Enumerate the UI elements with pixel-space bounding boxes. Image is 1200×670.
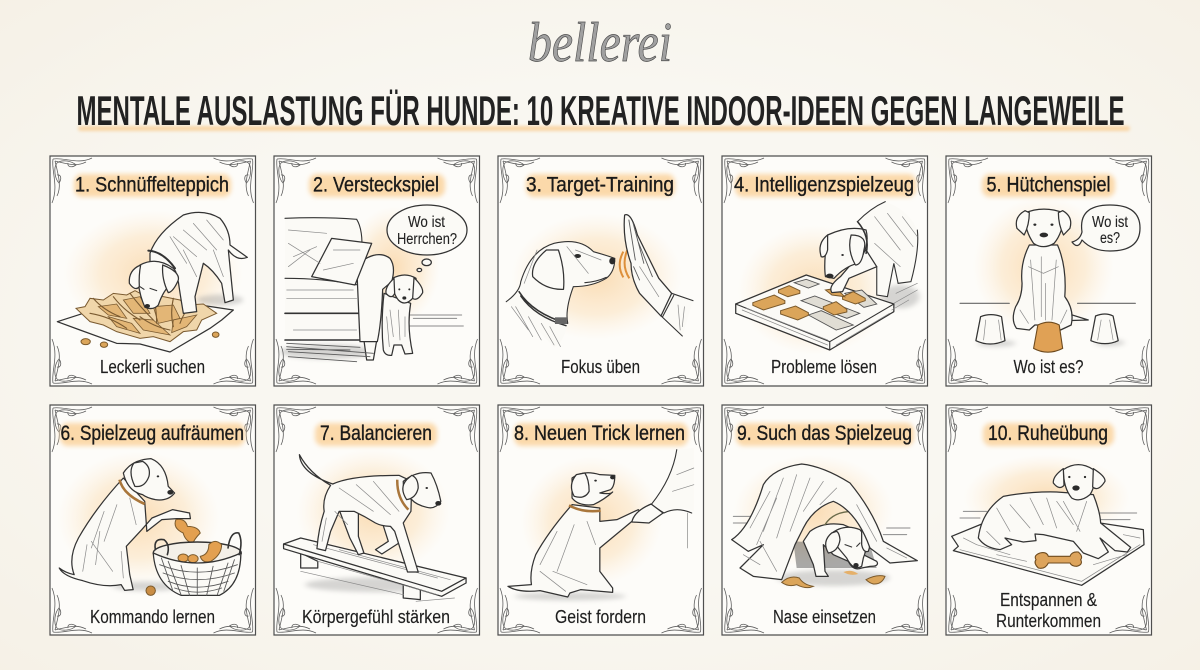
- heading 4: 4. Intelligenzspielzeug: [734, 174, 914, 196]
- illustration: dog behind sofa: [280, 207, 463, 362]
- illustration: dog on snuffle mat: [57, 210, 247, 352]
- heading 9: 9. Such das Spielzeug: [737, 422, 912, 445]
- illustration: dog with puzzle board: [736, 202, 919, 355]
- caption 7: Körpergefühl stärken: [302, 607, 450, 627]
- heading 5: 5. Hütchenspiel: [986, 174, 1110, 196]
- heading 3: 3. Target-Training: [526, 174, 674, 196]
- panel: 10 Ruheübung: [946, 405, 1152, 635]
- panel: 7 Balancieren: [274, 405, 480, 635]
- speech bubble: Wo ist Herrchen?: [387, 205, 467, 255]
- panel: 8 Neuen Trick lernen: [498, 405, 704, 635]
- title underline brush: [78, 126, 1130, 131]
- panel: 1 Schnüffelteppich: [50, 156, 256, 386]
- speech bubble: Wo ist es?: [1072, 205, 1140, 251]
- heading 1: 1. Schnüffelteppich: [75, 174, 229, 196]
- heading 2: 2. Versteckspiel: [313, 174, 439, 196]
- illustration: dog tidying toys into basket: [57, 451, 241, 595]
- heading 6: 6. Spielzeug aufräumen: [60, 422, 244, 445]
- heading 7: 7. Balancieren: [320, 422, 432, 445]
- caption 10: Entspannen &: [1000, 590, 1097, 610]
- illustration: dog nose to hand: [506, 213, 693, 347]
- panel: 6 Spielzeug aufräumen: [50, 405, 256, 635]
- caption 10: [996, 590, 1101, 631]
- heading 10: 10. Ruheübung: [988, 422, 1108, 445]
- panel: 2 Versteckspiel: [274, 156, 480, 386]
- logo: bellerei: bellerei: [528, 12, 672, 74]
- speech bubble: Wo ist es?: es?: [1100, 230, 1120, 247]
- caption 4: Probleme lösen: [771, 357, 877, 377]
- illustration: dog resting on mat with bone: [952, 455, 1144, 585]
- caption 6: Kommando lernen: [90, 607, 215, 627]
- panel: 5 Hütchenspiel: [946, 156, 1152, 386]
- illustration: dog giving paw: [508, 448, 694, 600]
- panel: 4 Intelligenzspielzeug: [722, 156, 928, 386]
- caption 10: Runterkommen: [996, 611, 1101, 631]
- caption 8: Geist fordern: [555, 607, 646, 627]
- panel: 3 Target-Training: [498, 156, 704, 386]
- caption 3: Fokus üben: [561, 357, 640, 377]
- speech bubble: Wo ist Herrchen?: Wo ist: [408, 214, 446, 231]
- illustration: dog under blanket: [732, 455, 917, 588]
- speech bubble: Wo ist es?: Wo ist: [1092, 214, 1129, 231]
- speech bubble: Wo ist Herrchen?: Herrchen?: [397, 231, 457, 248]
- caption 9: Nase einsetzen: [773, 607, 876, 627]
- heading 8: 8. Neuen Trick lernen: [514, 422, 685, 445]
- caption 5: Wo ist es?: [1014, 357, 1084, 377]
- panel: 9 Such das Spielzeug: [722, 405, 928, 635]
- caption 1: Leckerli suchen: [100, 357, 205, 377]
- illustration: dog on balance beam: [284, 448, 466, 601]
- illustration: dog with three cups: [960, 197, 1135, 352]
